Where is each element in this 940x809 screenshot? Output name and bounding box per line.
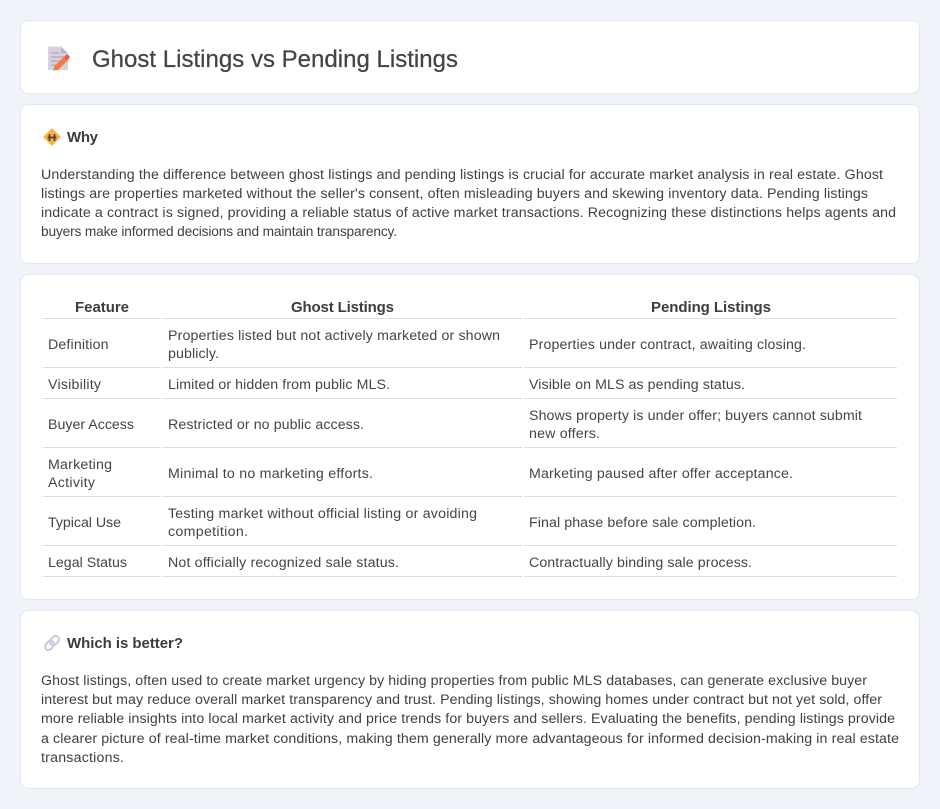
text block: which is better paragraph [41, 673, 899, 766]
text block: why paragraph: buyers make informed decisions and maintain transparency. [41, 224, 397, 239]
text block: why paragraph: listings are properties marketed without the seller's consent, often misleading buyers and skewing inventory data. Pending listings [41, 186, 868, 202]
table header row: Pending Listings [651, 299, 771, 316]
table header row [75, 299, 771, 316]
table row: definition: publicly. [168, 346, 219, 362]
table header row: Ghost Listings [291, 299, 394, 316]
text block: which is better paragraph: interest but may reduce overall market transparency and trust. Pending listings, showing homes under contract but not yet sold, offer [41, 692, 882, 708]
panel: why [20, 104, 920, 264]
table row: marketing activity: Marketing paused after offer acceptance. [529, 466, 793, 482]
icon: orange diamond sign [44, 129, 60, 145]
table row: typical use: competition. [168, 524, 248, 540]
text block: why paragraph [41, 167, 896, 239]
title: Ghost Listings vs Pending Listings [92, 46, 458, 73]
table row: marketing activity: Activity [48, 475, 96, 491]
table row: buyer access: Restricted or no public access. [168, 417, 364, 433]
text block: which is better paragraph: a clearer picture of real-time market conditions, making them generally more advantageous for informed decision-making in real estate [41, 731, 899, 747]
icon: link chain [44, 634, 60, 652]
table row: definition: Properties listed but not actively marketed or shown [168, 328, 500, 344]
table row: marketing activity: Marketing [48, 457, 112, 473]
panel: comparison table [20, 274, 920, 600]
table row: visibility: Visible on MLS as pending status. [529, 377, 745, 393]
table row: buyer access: Buyer Access [48, 417, 134, 433]
text block: which is better paragraph: more reliable insights into local market activity and price trends for buyers and sellers. Evaluating the benefits, pending listings provide [41, 711, 895, 727]
icon: memo with pencil [48, 46, 70, 70]
table row: buyer access: Shows property is under offer; buyers cannot submit [529, 408, 862, 424]
table row: definition: Definition [48, 337, 108, 353]
table row: typical use: Testing market without official listing or avoiding [168, 506, 477, 522]
table row: typical use: Typical Use [48, 515, 121, 531]
panel: which is better [20, 610, 920, 788]
text block: which is better paragraph: Ghost listings, often used to create market urgency by hiding properties from public MLS databases, can generate exclusive buyer [41, 673, 867, 689]
text block: why paragraph: Understanding the difference between ghost listings and pending listings is crucial for accurate market analysis in real estate. Ghost [41, 167, 883, 183]
text block: why paragraph: indicate a contract is signed, providing a reliable status of active market transactions. Recognizing these distinctions helps agents and [41, 205, 896, 221]
table row: legal status: Not officially recognized sale status. [168, 555, 399, 571]
table row: marketing activity [48, 457, 793, 491]
heading: which is better: Which is better? [67, 635, 183, 652]
table row: typical use [48, 506, 756, 540]
table row: legal status: Contractually binding sale process. [529, 555, 752, 571]
table row: legal status: Legal Status [48, 555, 127, 571]
table row: legal status [48, 555, 752, 571]
table row: definition [48, 328, 806, 362]
table header row: Feature [75, 299, 129, 316]
table row: buyer access: new offers. [529, 426, 600, 442]
table row: definition: Properties under contract, awaiting closing. [529, 337, 806, 353]
table row: typical use: Final phase before sale completion. [529, 515, 756, 531]
table row: visibility: Limited or hidden from public MLS. [168, 377, 390, 393]
text block: which is better paragraph: transactions. [41, 750, 124, 766]
heading: why: Why [67, 129, 99, 146]
table row: marketing activity: Minimal to no marketing efforts. [168, 466, 373, 482]
table row: visibility [48, 377, 745, 393]
table row: buyer access [48, 408, 862, 442]
panel: title header [20, 20, 920, 94]
table row: visibility: Visibility [48, 377, 102, 393]
